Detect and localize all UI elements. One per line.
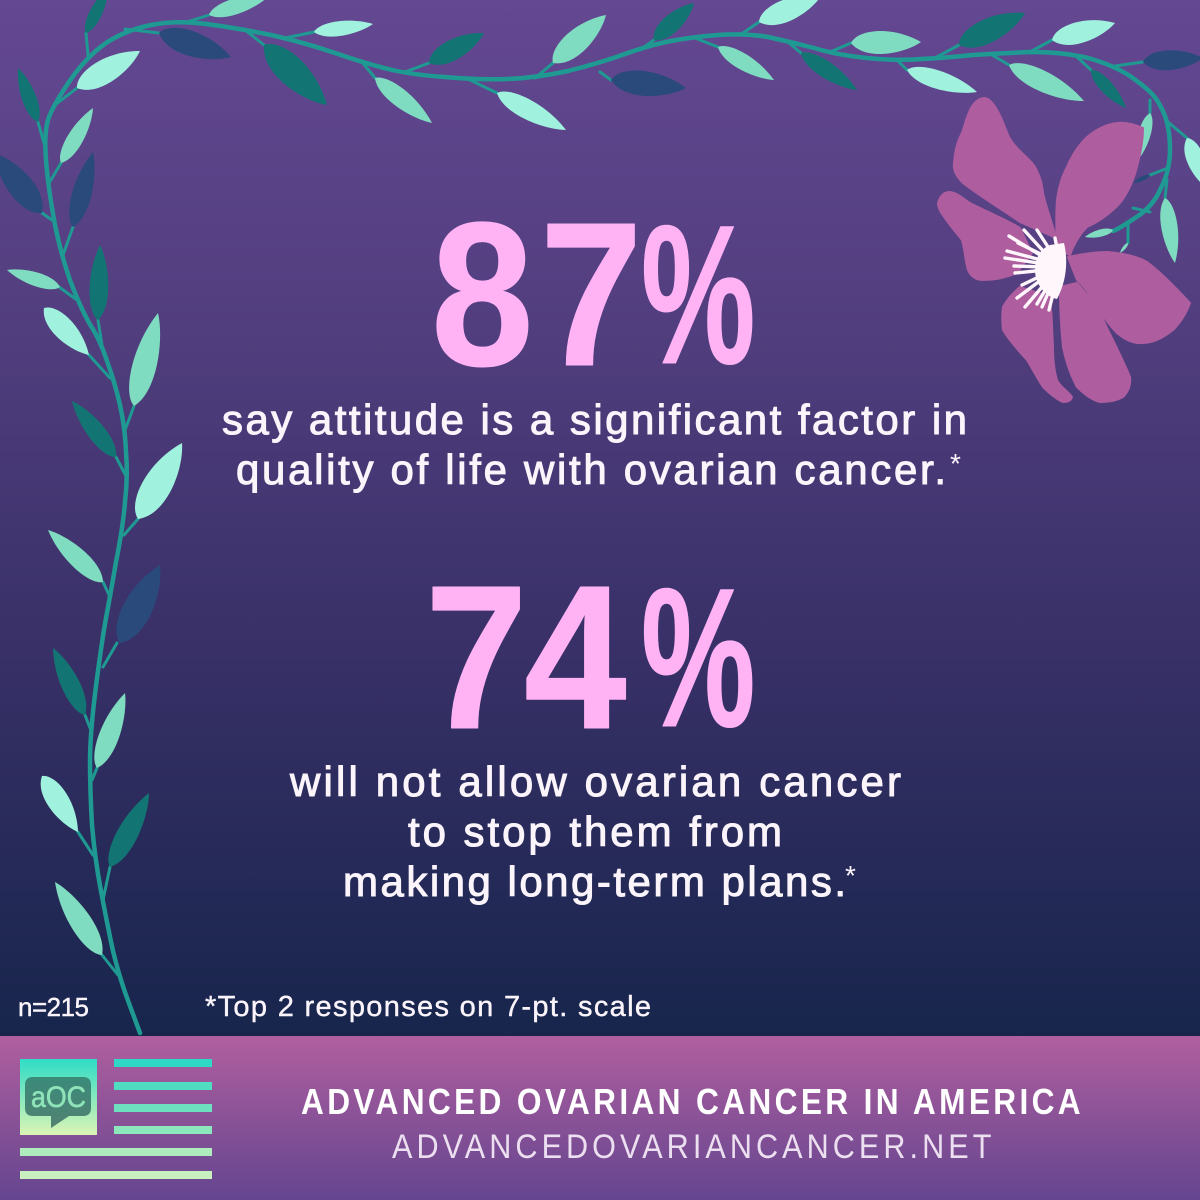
footnote: *Top 2 responses on 7-pt. scale [205, 991, 651, 1023]
text: 87% description: say attitude is a significant factor in [222, 396, 967, 443]
text: 74% description [289, 758, 901, 905]
stat: 87%: % [641, 185, 755, 406]
sample size: n=215 [18, 992, 89, 1022]
footer title: ADVANCED OVARIAN CANCER IN AMERICA [301, 1082, 1081, 1122]
text: 74% description: will not allow ovarian cancer [289, 758, 901, 805]
pale leaves [33, 0, 1200, 838]
logo text: aOC [31, 1081, 86, 1114]
logo: flag [20, 1059, 212, 1179]
text: 74% description: making long-term plans. [343, 858, 846, 905]
footer url: ADVANCEDOVARIANCANCER.NET [392, 1128, 991, 1165]
leaf branches [38, 15, 1187, 975]
text: 87% description [222, 396, 967, 493]
text: 74% description: * [845, 860, 856, 891]
mid green leaves [5, 0, 1183, 961]
navy leaves [0, 21, 1200, 650]
stat: 87% [431, 180, 755, 409]
stat: 74%: 74 [425, 543, 627, 772]
dark teal leaves [11, 0, 1131, 872]
stat: 74% [425, 543, 755, 772]
flag stripes [20, 1059, 212, 1179]
footer band [0, 1036, 1200, 1200]
speech bubble [25, 1077, 91, 1128]
stat: 87%: 87 [431, 180, 643, 409]
icon: flower [938, 98, 1190, 402]
flower centre [1005, 230, 1066, 310]
text: 74% description: to stop them from [408, 808, 782, 855]
vine stem [45, 22, 1170, 1033]
text: 87% description: quality of life with ovarian cancer. [236, 446, 946, 493]
flower petals [938, 98, 1190, 402]
text: 87% description: * [950, 448, 961, 479]
logo square [20, 1059, 97, 1135]
stat: 74%: % [641, 548, 755, 769]
